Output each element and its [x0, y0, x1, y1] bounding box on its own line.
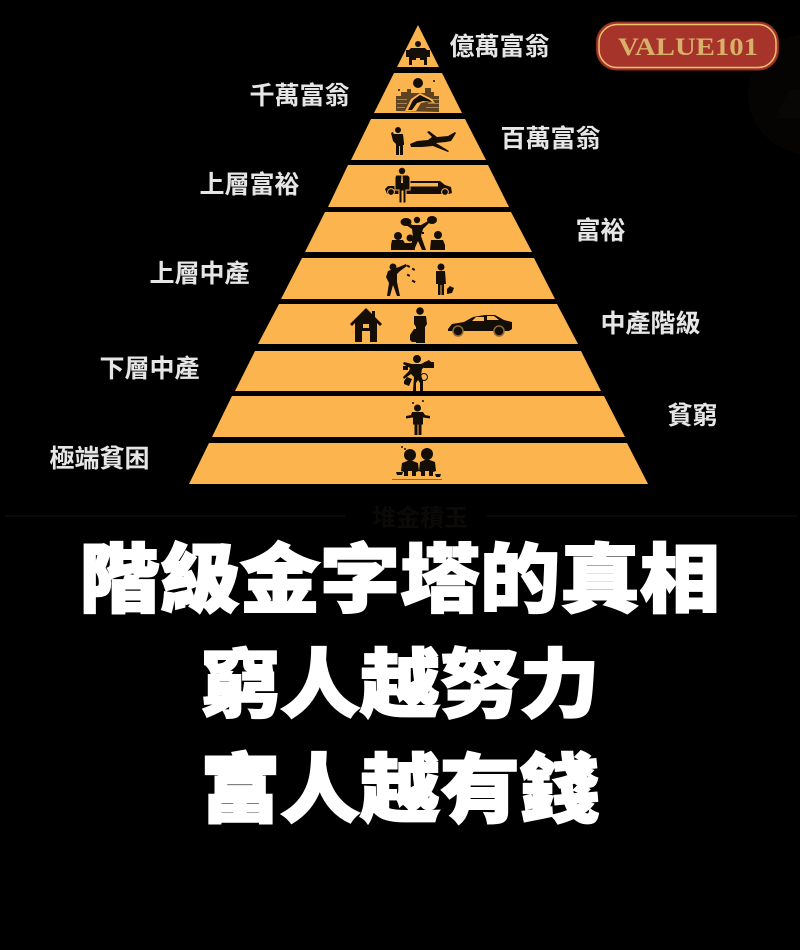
tier 8: [235, 351, 601, 391]
badge: VALUE101: [596, 22, 778, 70]
tier 7: [258, 304, 578, 344]
icon: man with private jet: [391, 127, 456, 155]
title: [80, 538, 720, 832]
icon: man on throne: [406, 41, 430, 65]
house: [350, 308, 382, 342]
car: [448, 315, 512, 331]
label: 上層中產: 上層中產: [150, 260, 250, 288]
title line 3: 富人越有錢: [200, 748, 600, 832]
label: 極端貧困: 極端貧困: [50, 444, 150, 473]
icon: two beggars with bowls: [392, 446, 442, 480]
icon: man swimming in money: [396, 78, 439, 112]
label: 億萬富翁: 億萬富翁: [450, 32, 550, 61]
man with money bag: [416, 307, 424, 315]
tier 2: [374, 73, 462, 113]
label: 下層中產: 下層中產: [100, 355, 200, 383]
title line 1: 階級金字塔的真相: [80, 538, 720, 622]
icon: multitasking lower-middle worker: [403, 355, 434, 391]
label: 中產階級: 中產階級: [600, 310, 701, 338]
label: 貧窮: 貧窮: [668, 401, 718, 430]
icon: rich man and followers: [391, 216, 445, 250]
tier 9: [212, 396, 625, 437]
icon: man throwing money and maid: [386, 264, 454, 296]
icon: shrugging poor man: [406, 400, 430, 435]
tier 1: [397, 25, 439, 67]
label: 富裕: 富裕: [576, 216, 626, 245]
icon: house, man and car: [350, 307, 512, 343]
badge: VALUE101: VALUE101: [618, 34, 758, 61]
label: 百萬富翁: 百萬富翁: [500, 124, 601, 153]
tier 3: [351, 119, 486, 160]
label: 千萬富翁: 千萬富翁: [250, 81, 350, 110]
faint background medallion: [748, 34, 800, 154]
icon: man with limousine: [385, 168, 452, 203]
label: 上層富裕: 上層富裕: [200, 170, 300, 199]
tier 4: [328, 165, 509, 207]
faint watermark rule with text: 堆金積玉: [372, 504, 468, 532]
tier 6: [281, 258, 555, 299]
tier 10: [189, 443, 648, 484]
tier 5: [305, 212, 532, 252]
pyramid: [189, 25, 648, 484]
title line 2: 窮人越努力: [200, 643, 600, 727]
